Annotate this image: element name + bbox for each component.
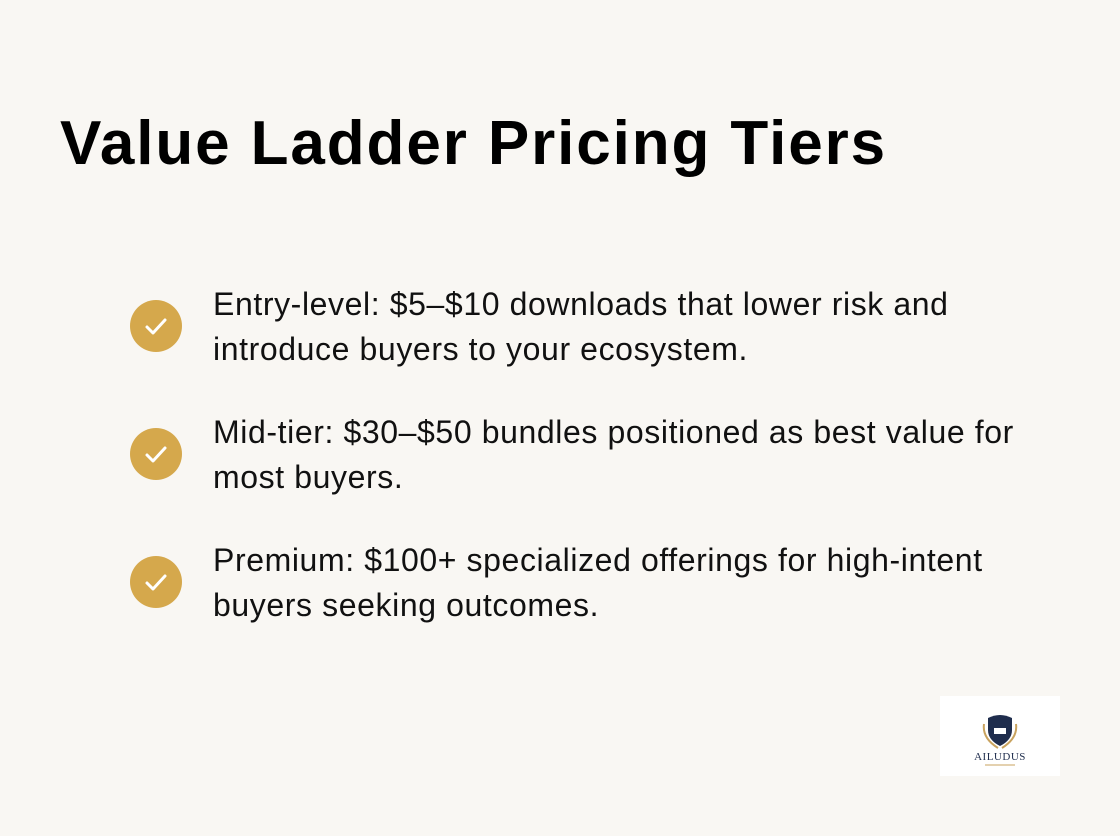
text: premium: buyers seeking outcomes.	[213, 587, 599, 623]
logo: AILUDUS	[974, 751, 1026, 763]
item: entry-level	[130, 286, 949, 367]
text: premium: Premium: $100+ specialized offerings for high-intent	[213, 542, 983, 578]
icon: check	[130, 556, 182, 608]
text: entry-level	[213, 286, 949, 367]
text: premium	[213, 542, 983, 623]
item: mid-tier	[130, 414, 1014, 495]
icon: check	[130, 428, 182, 480]
text: mid-tier: most buyers.	[213, 459, 403, 495]
icon: check	[130, 300, 182, 352]
text: entry-level: introduce buyers to your ecosystem.	[213, 331, 748, 367]
text: mid-tier: Mid-tier: $30–$50 bundles positioned as best value for	[213, 414, 1014, 450]
item: premium	[130, 542, 983, 623]
logo	[940, 696, 1060, 776]
text: entry-level: Entry-level: $5–$10 downloads that lower risk and	[213, 286, 949, 322]
title: Value Ladder Pricing Tiers	[60, 109, 887, 178]
text: mid-tier	[213, 414, 1014, 495]
